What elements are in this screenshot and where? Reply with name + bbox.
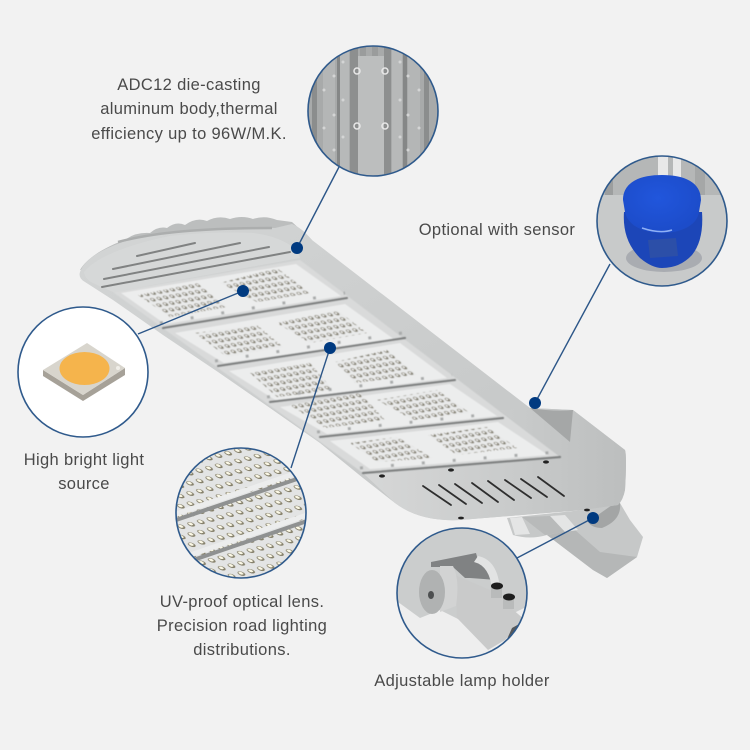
sensor socket wedge — [530, 408, 573, 442]
holder arm — [458, 612, 522, 650]
holder bolts — [491, 582, 515, 609]
module frames — [113, 260, 560, 473]
lens band lines — [177, 478, 305, 560]
housing body — [80, 224, 626, 520]
leader line: lens — [291, 348, 330, 468]
holder detail circle — [398, 528, 526, 650]
cap shadow — [626, 250, 702, 272]
leader line: body — [297, 167, 339, 248]
sensor detail circle — [598, 156, 726, 286]
cap photocell window — [648, 238, 678, 258]
circle outline: holder — [397, 528, 527, 658]
text: optical lens: distributions. — [193, 641, 291, 659]
text: high bright light source — [24, 451, 144, 493]
holder slot — [431, 553, 490, 580]
callout: ADC12 aluminum body — [91, 40, 450, 254]
holder hub — [440, 566, 457, 612]
leader line: LED — [138, 291, 243, 334]
vent slots — [423, 477, 564, 505]
top cap plate — [84, 232, 300, 292]
text: optional with sensor: Optional with sensor — [419, 221, 575, 239]
circle outline: heat sink — [308, 46, 438, 176]
callout: LED chip light source — [18, 285, 249, 493]
text: optical lens: Precision road lighting — [157, 617, 327, 635]
holder rear ring — [474, 556, 499, 584]
marker dot: body — [291, 242, 303, 254]
circle outline: sensor — [597, 156, 727, 286]
LED module row 2 — [175, 304, 395, 363]
callout: adjustable lamp holder — [374, 512, 599, 690]
leader line: holder — [517, 518, 593, 558]
LED module row 4 — [280, 384, 497, 434]
LED module row 1 — [121, 264, 341, 324]
circle outline: lens — [176, 448, 306, 578]
housing screws — [379, 460, 590, 519]
text: high bright light source: High bright light — [24, 451, 144, 469]
LED chip — [43, 343, 125, 401]
LED module row 3 — [229, 343, 447, 401]
circle: LED chip — [18, 307, 148, 437]
fin pins — [322, 60, 420, 152]
text: ADC12 body: ADC12 die-casting — [117, 76, 261, 94]
cap flange — [624, 212, 702, 268]
module clips — [160, 293, 557, 468]
text: optical lens: UV-proof optical lens. — [160, 593, 324, 611]
top cap slots — [102, 243, 290, 287]
mounting plate — [358, 56, 384, 176]
mounting arm — [507, 503, 643, 578]
text: ADC12 body — [91, 76, 287, 143]
text: ADC12 body: efficiency up to 96W/M.K. — [91, 125, 287, 143]
text: high bright light source: source — [58, 475, 110, 493]
callout: optional sensor — [419, 150, 740, 409]
marker dot: sensor — [529, 397, 541, 409]
lens white strips — [177, 473, 306, 556]
LED module array — [113, 260, 560, 473]
driver housing front — [363, 408, 626, 520]
heat sink detail circle — [308, 46, 438, 176]
callout: optical lens — [157, 342, 336, 659]
heat sink bolts — [354, 68, 388, 129]
rim shadow band — [118, 228, 272, 242]
cap highlight — [642, 228, 672, 232]
leader line: sensor — [535, 264, 610, 403]
module dividers — [163, 298, 560, 473]
street light fixture — [80, 217, 643, 578]
marker dot: LED — [237, 285, 249, 297]
LED module row 5 — [330, 422, 548, 469]
cap top — [623, 175, 701, 233]
lens detail circle — [177, 448, 305, 577]
text: adjustable lamp holder: Adjustable lamp holder — [374, 672, 550, 690]
rear finned edge — [80, 217, 312, 270]
marker dot: lens — [324, 342, 336, 354]
text: optical lens — [157, 593, 327, 659]
marker dot: holder — [587, 512, 599, 524]
text: ADC12 body: aluminum body,thermal — [100, 100, 278, 118]
